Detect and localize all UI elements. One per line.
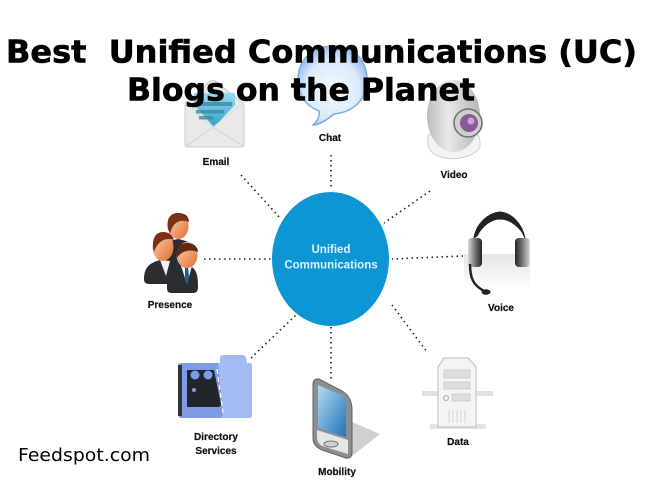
central hub: Unified Communications: Communications	[284, 260, 378, 272]
source credit: Feedspot.com: Feedspot.com	[18, 446, 150, 466]
label: Data: Data	[447, 437, 469, 448]
label: Directory Services: Directory	[194, 432, 238, 443]
icon: voice headset	[464, 212, 530, 295]
icon: mobility phone	[313, 379, 380, 458]
dotted connector lines	[204, 155, 463, 379]
title: Blogs on the Planet	[127, 72, 475, 108]
label: Voice: Voice	[488, 303, 514, 314]
icon: video webcam	[427, 80, 482, 159]
left person	[144, 232, 178, 284]
title	[6, 34, 637, 108]
front person	[167, 242, 198, 293]
icon: directory services folder	[178, 355, 252, 418]
icon: data server	[422, 358, 493, 429]
central hub: Unified Communications	[272, 192, 389, 326]
title: Best Unified Communications (UC)	[6, 34, 637, 70]
label: Presence: Presence	[148, 300, 193, 311]
label: Directory Services: Services	[195, 446, 237, 457]
label: Chat: Chat	[319, 133, 342, 144]
icon: presence group of people	[144, 213, 198, 293]
central hub: Unified Communications: Unified	[312, 244, 350, 256]
label: Email: Email	[203, 157, 230, 168]
back person	[160, 213, 196, 272]
label: Directory Services	[194, 432, 238, 457]
icon: email envelope	[185, 80, 244, 147]
label: Mobility: Mobility	[318, 467, 356, 478]
icon: chat bubble	[298, 46, 367, 125]
label: Video: Video	[440, 170, 468, 181]
